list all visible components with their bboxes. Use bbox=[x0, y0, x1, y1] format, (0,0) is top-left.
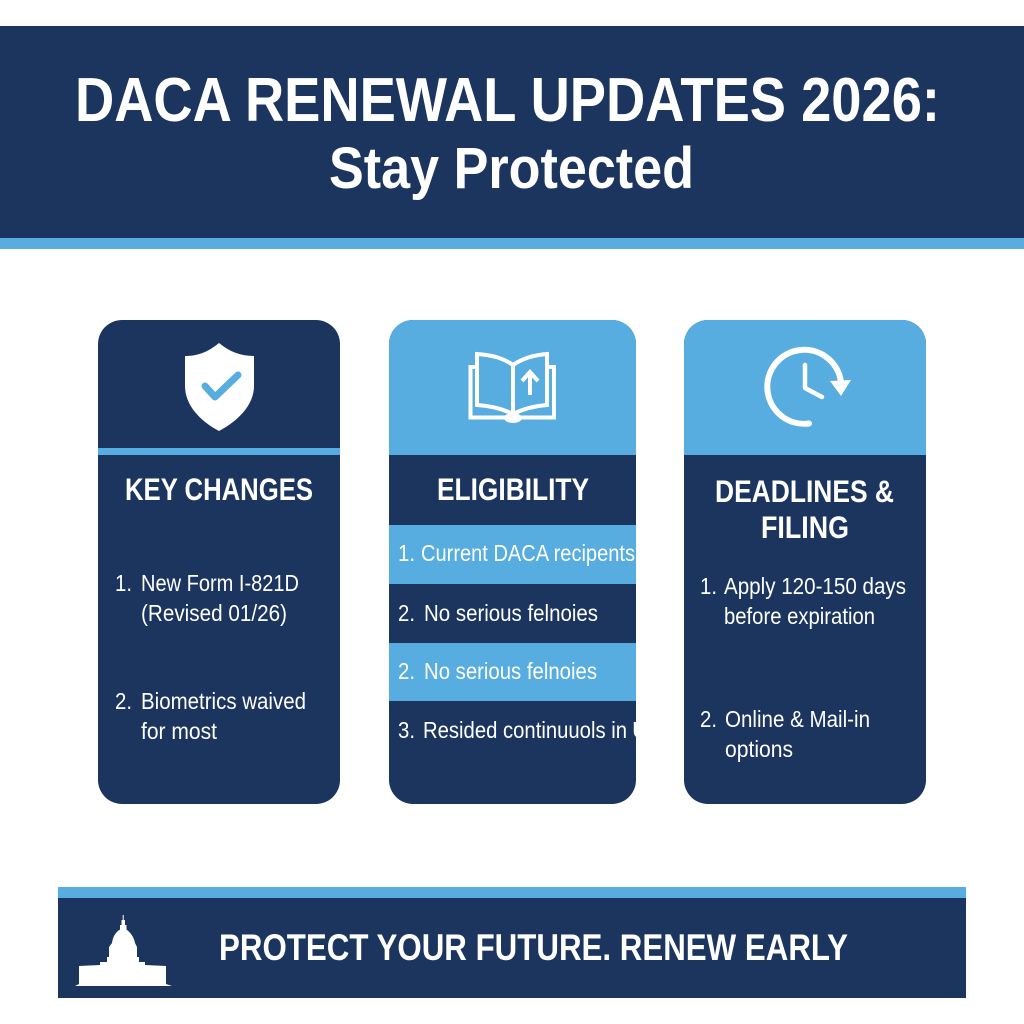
panel: key changes bbox=[98, 320, 340, 804]
list item 2: 2. bbox=[700, 706, 717, 732]
list rows bbox=[398, 540, 649, 743]
list item 1 bbox=[700, 573, 906, 629]
heading: deadlines and filing: DEADLINES & bbox=[715, 473, 894, 509]
heading: key changes: KEY CHANGES bbox=[125, 471, 313, 507]
list rows: Resided continuuols in bbox=[423, 717, 627, 743]
panel: deadlines and filing bbox=[684, 320, 926, 804]
list item 2: options bbox=[725, 736, 793, 762]
list rows: U bbox=[632, 717, 649, 743]
icon: capitol building bbox=[75, 915, 172, 986]
list item 2: Online & Mail-in bbox=[725, 706, 870, 732]
list item 1 bbox=[115, 570, 299, 626]
list item 2 bbox=[700, 706, 870, 762]
footer call to action: PROTECT YOUR FUTURE. RENEW EARLY bbox=[219, 927, 848, 968]
list rows: Current DACA recipents bbox=[421, 540, 635, 566]
title line 2: Stay Protected bbox=[329, 136, 694, 201]
list rows: No serious felnoies bbox=[424, 600, 598, 626]
list item 2: Biometrics waived bbox=[141, 688, 306, 714]
list item 1: before expiration bbox=[724, 603, 875, 629]
panel: eligibility bbox=[389, 320, 649, 804]
list item 1: Apply 120-150 days bbox=[724, 573, 906, 599]
list rows: No serious felnoies bbox=[424, 658, 597, 684]
footer banner bbox=[58, 887, 966, 998]
header banner bbox=[0, 26, 1024, 249]
list item 2: 2. bbox=[115, 688, 132, 714]
list item 1: 1. bbox=[115, 570, 132, 596]
list item 1: 1. bbox=[700, 573, 717, 599]
list item 1: New Form I-821D bbox=[141, 570, 299, 596]
heading: deadlines and filing bbox=[715, 473, 894, 545]
icon: open book with arrow bbox=[470, 354, 554, 423]
heading: eligibility: ELIGIBILITY bbox=[437, 471, 589, 507]
icon: shield with check bbox=[185, 343, 254, 431]
list item 1: (Revised 01/26) bbox=[141, 600, 287, 626]
list rows: 2. bbox=[398, 658, 415, 684]
list item 2 bbox=[115, 688, 306, 744]
list rows: 1. bbox=[398, 540, 415, 566]
icon: clock with arrow bbox=[767, 350, 851, 424]
list item 2: for most bbox=[141, 718, 217, 744]
heading: deadlines and filing: FILING bbox=[761, 509, 849, 545]
list rows: 2. bbox=[398, 600, 415, 626]
list rows: 3. bbox=[398, 717, 415, 743]
